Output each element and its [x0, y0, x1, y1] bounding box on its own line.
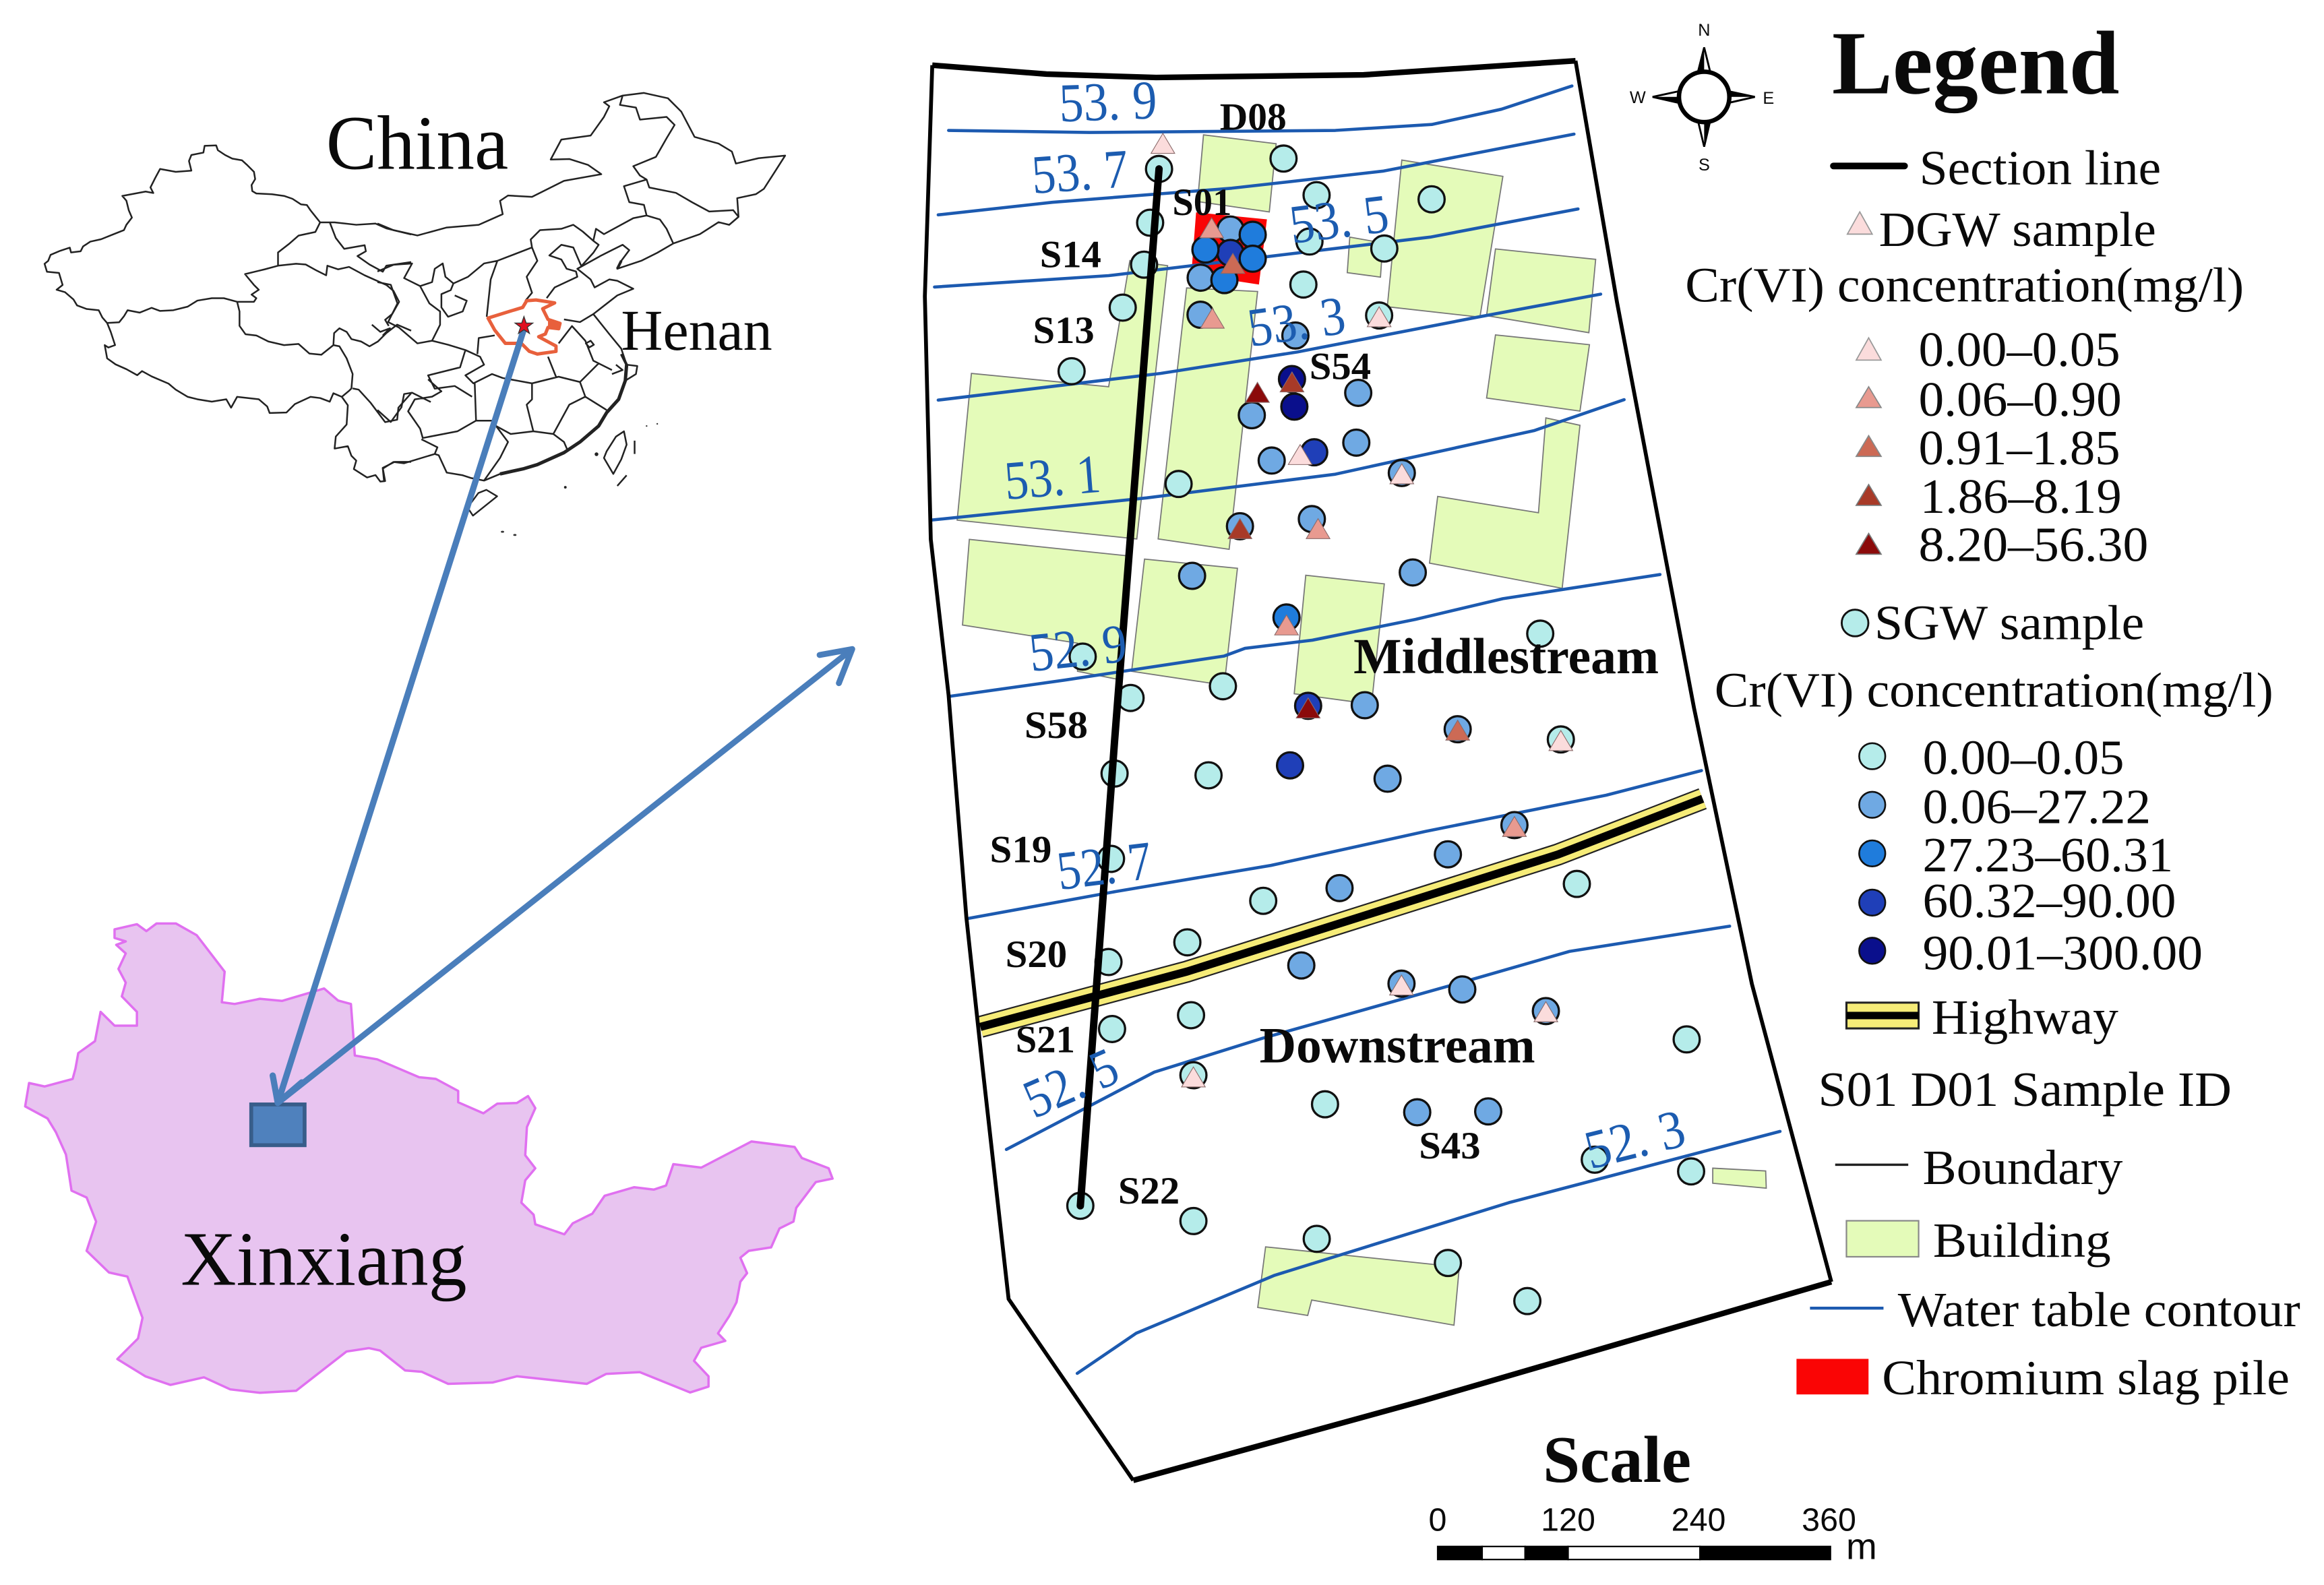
- contour labels: 52. 7: [1053, 830, 1155, 902]
- legend: SGW classes: 60.32–90.00: [1923, 873, 2176, 928]
- legend heading: Legend: [1832, 13, 2120, 114]
- label: Downstream: Downstream: [1260, 1018, 1535, 1074]
- contour labels: 52. 3: [1579, 1097, 1691, 1181]
- sample ID labels: D08: [1220, 96, 1287, 139]
- site boundary: [925, 61, 1831, 1481]
- sample ID labels: [989, 96, 1481, 1212]
- legend: SGW classes: 27.23–60.31: [1923, 828, 2173, 882]
- sample ID labels: S58: [1025, 704, 1088, 747]
- legend: section line: Section line: [1920, 141, 2161, 195]
- legend: boundary: Boundary: [1923, 1140, 2122, 1195]
- sample ID labels: S19: [989, 829, 1051, 871]
- SGW sample circles: [1059, 146, 1704, 1314]
- China west: Xinjiang, Tibet, Qinghai, Gansu, Yunnan borders: [44, 146, 411, 482]
- legend: building: Building: [1933, 1213, 2111, 1268]
- scale labels: 360: [1802, 1502, 1856, 1539]
- highway: [980, 799, 1703, 1027]
- arrow: study area to site map: [278, 649, 852, 1103]
- arrow: Henan to study area: [273, 329, 524, 1103]
- legend: highway: [1846, 990, 2118, 1045]
- sample ID labels: S14: [1040, 234, 1101, 276]
- legend: SGW classes: 0.00–0.05: [1923, 731, 2124, 785]
- contour labels: 53. 5: [1286, 183, 1392, 255]
- panel: site map: [925, 61, 1831, 1481]
- chromium slag pile: [1192, 212, 1267, 284]
- sample ID labels: S20: [1006, 933, 1067, 976]
- scale labels: 120: [1541, 1502, 1595, 1539]
- sample ID labels: S21: [1016, 1018, 1075, 1061]
- scale labels: 240: [1672, 1502, 1725, 1539]
- legend: DGW classes: 8.20–56.30: [1919, 518, 2148, 572]
- legend: building: [1846, 1213, 2111, 1268]
- legend: DGW classes: 0.91–1.85: [1919, 421, 2120, 475]
- icon: Henan star: [515, 317, 533, 334]
- legend: DGW sample: DGW sample: [1879, 202, 2156, 257]
- legend: SGW classes: 90.01–300.00: [1923, 925, 2203, 980]
- contour labels: 53. 3: [1244, 284, 1349, 359]
- icon: north arrow compass: N: [1698, 21, 1711, 40]
- legend: chromium slag pile: Chromium slag pile: [1882, 1350, 2290, 1405]
- scale labels: [1429, 1502, 1877, 1567]
- icon: north arrow compass: W: [1630, 88, 1646, 107]
- legend: water table contour: Water table contour: [1898, 1282, 2300, 1337]
- icon: north arrow compass: E: [1763, 89, 1774, 108]
- sample ID labels: S13: [1033, 309, 1095, 352]
- legend: DGW classes: 0.06–0.90: [1919, 372, 2122, 427]
- map: Henan province outline: [488, 300, 560, 354]
- contour labels: [1002, 69, 1691, 1181]
- section line: [1080, 169, 1159, 1206]
- contour labels: 52. 5: [1014, 1035, 1127, 1130]
- label: China: China: [326, 100, 508, 186]
- legend: SGW classes: 0.06–27.22: [1923, 780, 2151, 834]
- sample ID labels: S54: [1310, 345, 1371, 387]
- contour labels: 53. 1: [1002, 443, 1103, 511]
- legend: DGW classes: 1.86–8.19: [1920, 469, 2122, 524]
- study area square: [251, 1105, 305, 1145]
- scale bar segments: [1438, 1547, 1831, 1559]
- scale heading: Scale: [1543, 1423, 1691, 1497]
- sample ID labels: S22: [1118, 1170, 1180, 1212]
- water table contours: [931, 86, 1780, 1373]
- legend: SGW classes: [1859, 731, 2203, 980]
- buildings: [957, 135, 1767, 1326]
- icon: north arrow compass: S: [1699, 156, 1710, 175]
- legend: SGW concentration heading: Cr(VI) concentration(mg/l): [1715, 663, 2273, 718]
- panel: scale bar: [1429, 1423, 1877, 1567]
- contour labels: 53. 9: [1058, 69, 1158, 133]
- contour labels: 53. 7: [1030, 137, 1130, 206]
- map: China provinces: [44, 93, 785, 536]
- label: Xinxiang: Xinxiang: [181, 1216, 467, 1301]
- label: Henan: Henan: [621, 299, 772, 363]
- legend: highway: Highway: [1932, 990, 2118, 1045]
- label: Middlestream: Middlestream: [1353, 629, 1659, 685]
- legend: DGW classes: [1856, 322, 2148, 572]
- sample ID labels: S01: [1172, 181, 1231, 224]
- DGW sample triangles: [1151, 133, 1572, 1087]
- scale labels: m: [1846, 1525, 1877, 1567]
- icon: north arrow compass: [1630, 21, 1774, 175]
- map: Xinxiang region: [25, 923, 832, 1393]
- China east: provinces and coast: [377, 93, 785, 489]
- legend: DGW concentration heading: Cr(VI) concentration(mg/l): [1685, 257, 2244, 312]
- scale labels: 0: [1429, 1502, 1446, 1539]
- panel: legend: [1685, 13, 2300, 1405]
- legend: DGW classes: 0.00–0.05: [1919, 322, 2120, 377]
- sample ID labels: S43: [1419, 1125, 1481, 1167]
- contour labels: 52. 9: [1026, 612, 1130, 683]
- legend: sample ID: S01 D01 Sample ID: [1818, 1062, 2232, 1117]
- China islands: Hainan and South China Sea: [468, 490, 516, 536]
- legend: SGW sample: SGW sample: [1874, 595, 2144, 650]
